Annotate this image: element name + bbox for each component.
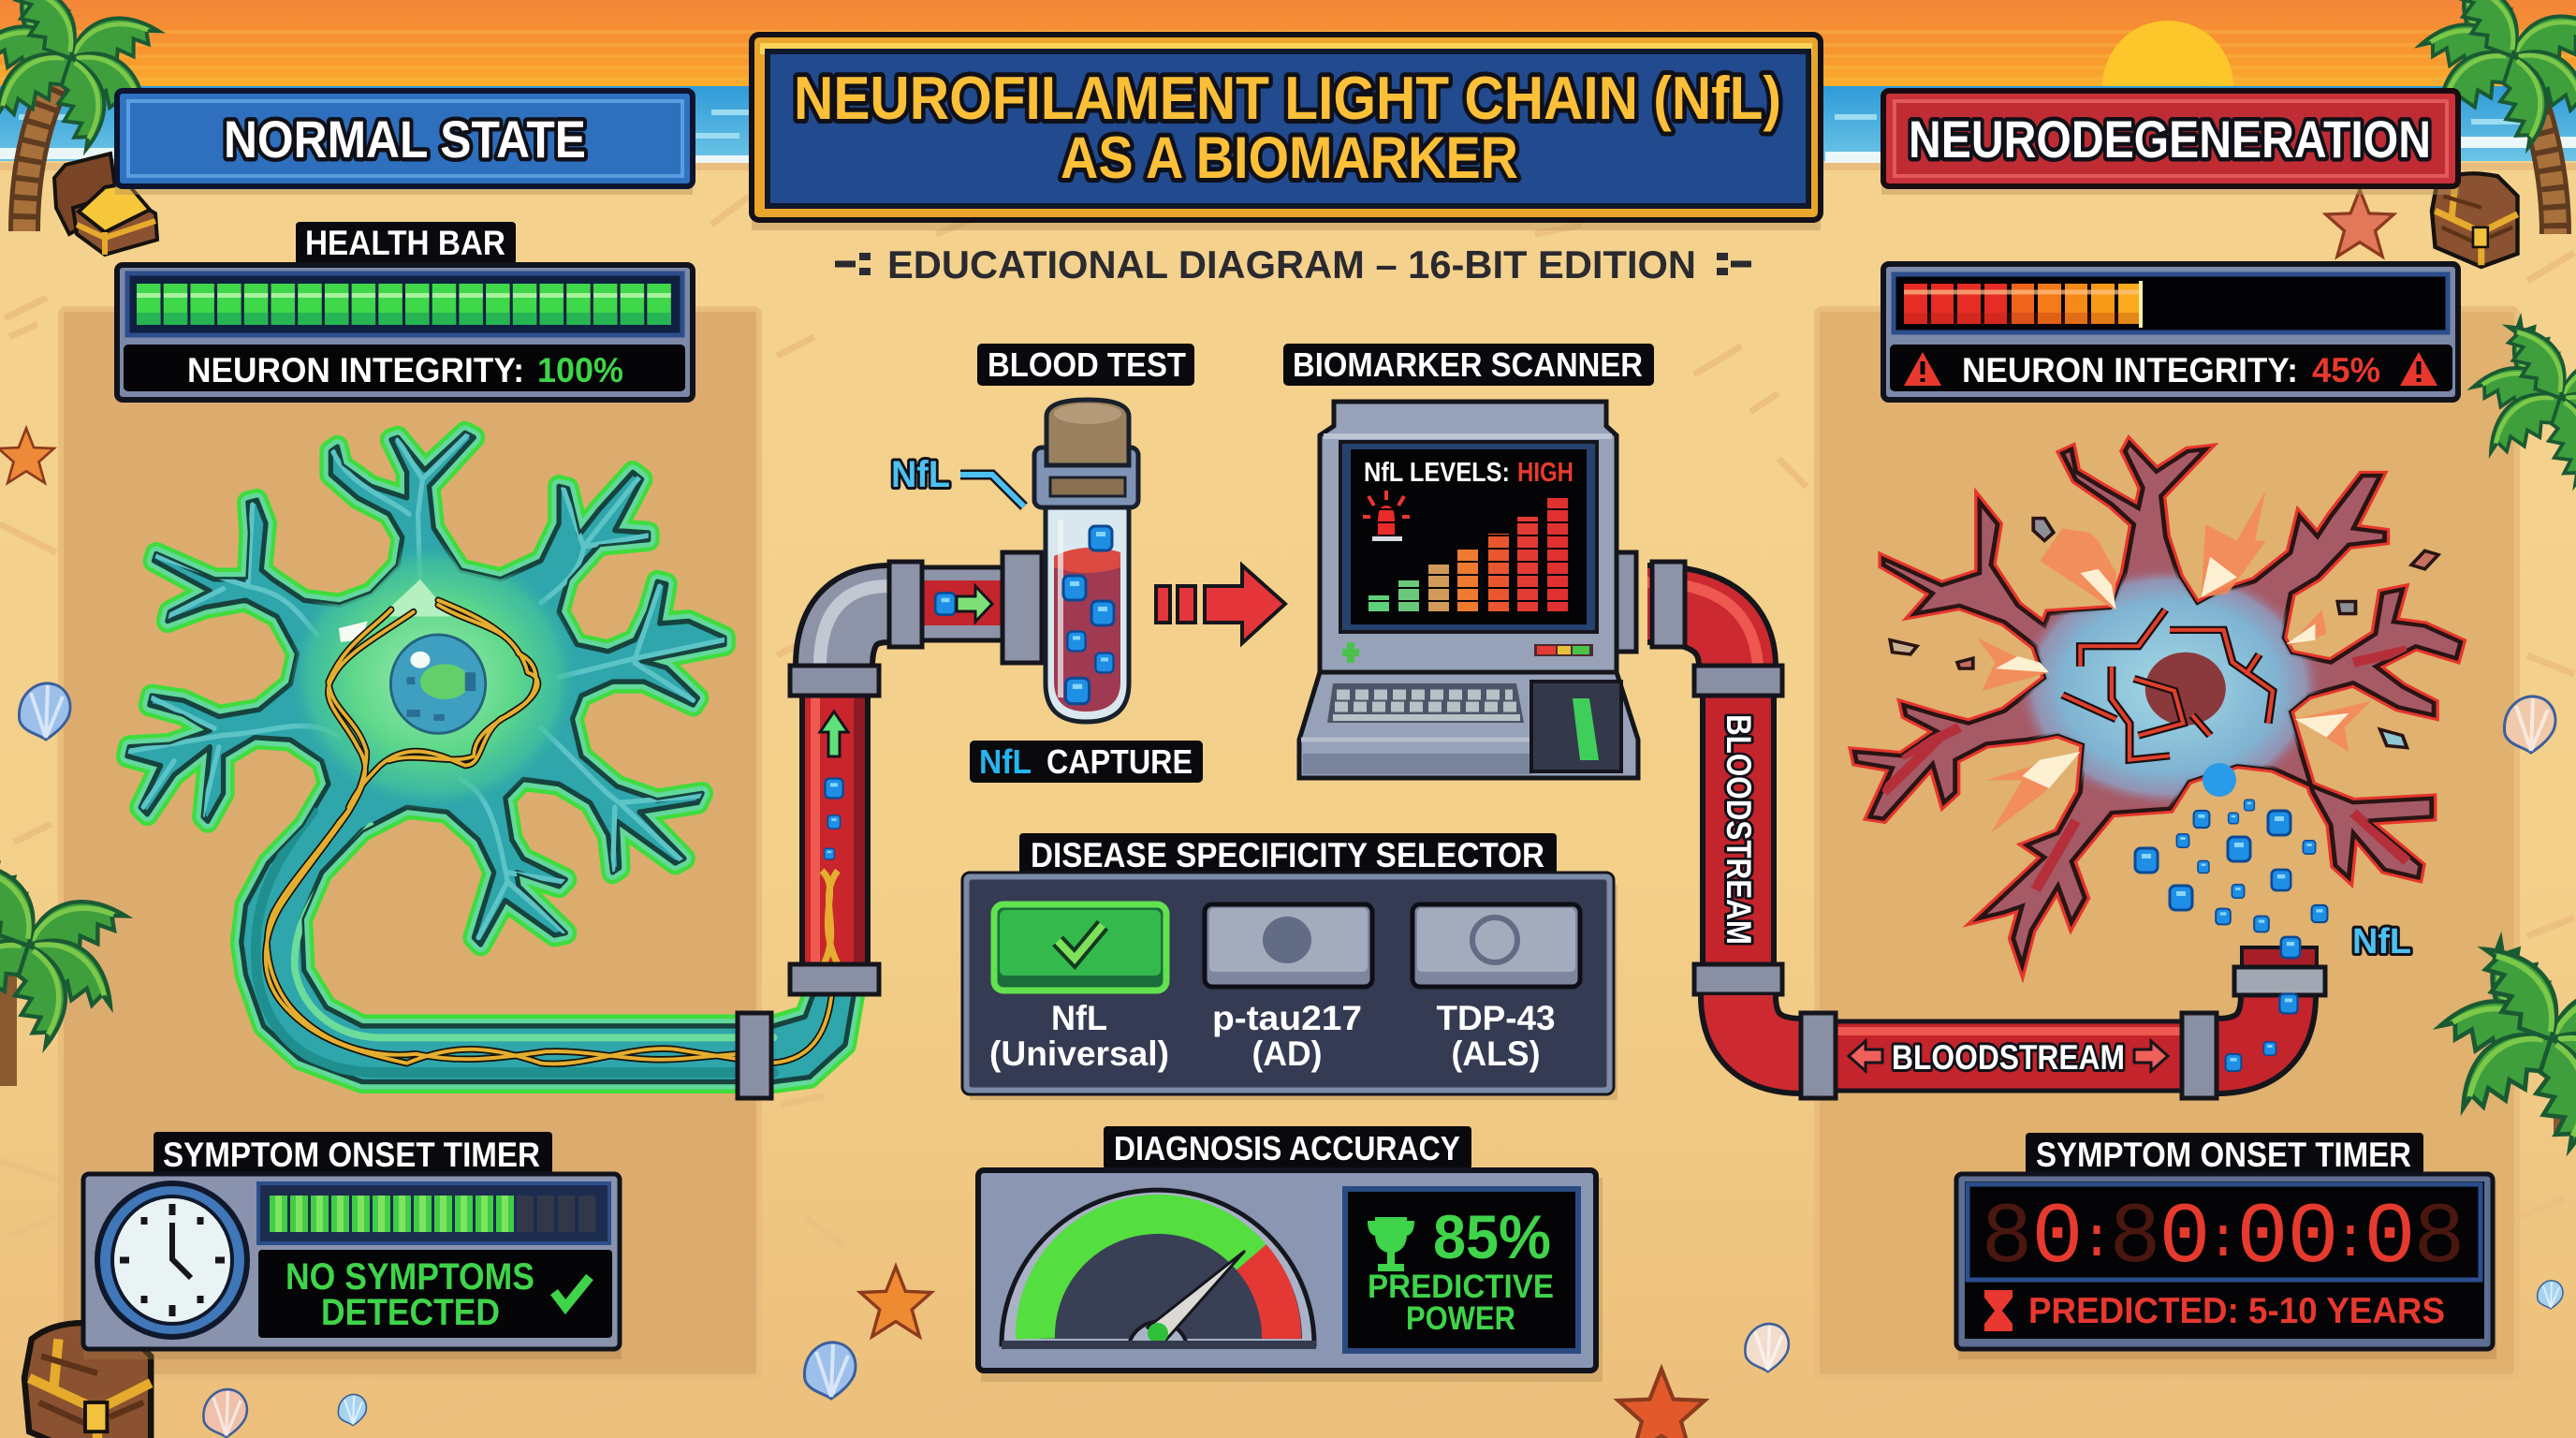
predictive power readout: 85% <box>1433 1202 1551 1271</box>
option labels: NfL <box>1051 999 1107 1037</box>
banner: neurodegeneration: NEURODEGENERATION <box>1909 110 2431 169</box>
option labels: TDP-43 <box>1436 999 1556 1037</box>
screen: HIGH <box>1517 458 1573 488</box>
integrity readout <box>124 345 685 391</box>
bar chart <box>1367 498 1573 611</box>
option labels <box>989 999 1556 1073</box>
label: DIAGNOSIS ACCURACY <box>1114 1129 1460 1167</box>
button: NfL selected <box>994 904 1166 990</box>
predictive power readout: POWER <box>1406 1300 1515 1337</box>
pipe: horizontal red to tube <box>889 552 1042 663</box>
countdown digits: 8 <box>1981 1189 2033 1287</box>
title plaque <box>752 35 1821 230</box>
damaged cell body <box>2015 565 2324 809</box>
NfL label near damaged neuron: NfL <box>2352 922 2411 961</box>
no symptoms readout: DETECTED <box>321 1292 500 1333</box>
predictive power readout <box>1345 1189 1578 1351</box>
decorative sun <box>2102 21 2233 86</box>
test tube <box>1034 400 1138 722</box>
debris <box>1890 519 2438 748</box>
panel: normal state backdrop <box>61 309 759 1377</box>
no symptoms readout: NO SYMPTOMS <box>285 1256 534 1298</box>
countdown digits: 0 <box>2287 1189 2339 1287</box>
NfL capture label: NfL <box>979 742 1032 781</box>
pipe: left grey elbow and red riser <box>790 586 889 994</box>
neuron cell body <box>286 542 581 812</box>
title text <box>794 64 1781 191</box>
red orange segments <box>1904 281 2143 328</box>
label: SYMPTOM ONSET TIMER <box>2036 1136 2411 1174</box>
NfL capture label <box>970 741 1203 783</box>
button: TDP-43 <box>1412 904 1580 987</box>
bursts <box>1978 490 2371 833</box>
decor: palm tree right middle <box>2469 312 2576 488</box>
countdown digits: 0 <box>2159 1189 2211 1287</box>
symptom timer degenerated <box>1956 1133 2496 1359</box>
monitor <box>1320 402 1617 672</box>
health bar normal <box>117 265 693 400</box>
arrow: tube to scanner <box>1156 565 1285 643</box>
icon: hourglass <box>1984 1290 2012 1331</box>
decor: palm tree top left <box>0 0 164 231</box>
NfL particles released <box>2135 763 2327 958</box>
subtitle: EDUCATIONAL DIAGRAM – 16-BIT EDITION <box>887 242 1696 286</box>
banner: normal state: NORMAL STATE <box>224 110 586 169</box>
icon: green up arrow <box>820 712 848 756</box>
broken filaments <box>2062 609 2273 760</box>
base with keyboard <box>1299 672 1638 778</box>
gauge <box>1002 1190 1316 1349</box>
decor: palm tree top right <box>2417 0 2576 234</box>
neuron healthy <box>127 433 855 1082</box>
icon: siren <box>1363 491 1410 541</box>
NfL callout: NfL <box>891 454 950 495</box>
label: SYMPTOM ONSET TIMER <box>163 1136 540 1174</box>
screen <box>1351 449 1587 624</box>
neuron damaged <box>1854 443 2461 965</box>
diagnosis accuracy <box>978 1126 1603 1382</box>
icon: warning right <box>2400 352 2437 386</box>
label: DISEASE SPECIFICITY SELECTOR <box>1031 836 1544 874</box>
countdown digits: : <box>2080 1210 2114 1273</box>
decor: treasure chest top right <box>2432 173 2518 267</box>
collar <box>1034 448 1138 507</box>
option labels: (AD) <box>1252 1034 1322 1073</box>
countdown digits: 8 <box>2413 1189 2466 1287</box>
icon: warning left <box>1904 352 1941 386</box>
integrity readout: 45% <box>2312 351 2380 389</box>
integrity readout: 100% <box>537 351 623 389</box>
title text: NEUROFILAMENT LIGHT CHAIN (NfL) <box>794 64 1781 132</box>
banner: neurodegeneration <box>1881 91 2459 195</box>
countdown digits: : <box>2334 1210 2367 1273</box>
symptom timer normal <box>83 1132 622 1359</box>
bloodstream vertical text: BLOODSTREAM <box>1720 714 1758 945</box>
NfL particles in pipe <box>2226 994 2298 1071</box>
title text: AS A BIOMARKER <box>1061 125 1518 191</box>
integrity readout: NEURON INTEGRITY: <box>187 351 524 389</box>
nucleus <box>390 635 486 733</box>
integrity readout: NEURON INTEGRITY: <box>1962 351 2298 389</box>
damaged nucleus <box>2145 653 2226 726</box>
green segments <box>137 284 673 325</box>
option labels: p-tau217 <box>1212 999 1362 1037</box>
decor: open treasure chest top left <box>54 154 157 255</box>
countdown digits: 0 <box>2031 1189 2084 1287</box>
cork <box>1046 400 1129 465</box>
decor: palm tree left middle <box>0 846 131 1086</box>
NfL callout <box>891 454 1024 506</box>
decor: treasure chest bottom left <box>24 1323 151 1438</box>
predicted text: PREDICTED: 5-10 YEARS <box>2028 1291 2445 1331</box>
option labels: (ALS) <box>1451 1034 1541 1073</box>
integrity readout <box>1890 345 2452 391</box>
scanner <box>1299 402 1638 778</box>
axon clamp <box>738 1013 771 1098</box>
panel: neurodegeneration backdrop <box>1817 309 2517 1377</box>
blood <box>1054 549 1120 712</box>
countdown digits: 0 <box>2236 1189 2289 1287</box>
option labels: (Universal) <box>989 1034 1169 1073</box>
NfL particles in riser <box>825 779 843 859</box>
timer bar <box>258 1183 609 1243</box>
NfL capture label: CAPTURE <box>1046 742 1193 781</box>
health bar degenerated <box>1883 264 2458 400</box>
disease specificity selector <box>962 833 1617 1100</box>
neurofilament strands <box>266 600 832 1064</box>
button: p-tau217 <box>1205 904 1372 987</box>
no symptoms readout <box>258 1250 612 1338</box>
biomarker scanner label: BIOMARKER SCANNER <box>1293 345 1643 384</box>
countdown digits: 8 <box>2109 1189 2161 1287</box>
countdown digits: : <box>2206 1210 2240 1273</box>
pipe: right red loop <box>1647 562 2325 1098</box>
banner: normal state <box>115 91 693 195</box>
NfL particles in tube <box>1063 526 1114 704</box>
screen: NfL LEVELS: <box>1364 458 1510 488</box>
predictive power readout: PREDICTIVE <box>1368 1269 1554 1305</box>
health bar label: HEALTH BAR <box>305 224 505 262</box>
decor: palm tree right bottom <box>2437 931 2576 1153</box>
blood test label: BLOOD TEST <box>988 345 1186 384</box>
bloodstream horizontal text: BLOODSTREAM <box>1892 1038 2125 1077</box>
countdown digits: 0 <box>2364 1189 2416 1287</box>
icon: clock <box>97 1183 247 1337</box>
decor: seashells <box>19 683 2563 1437</box>
